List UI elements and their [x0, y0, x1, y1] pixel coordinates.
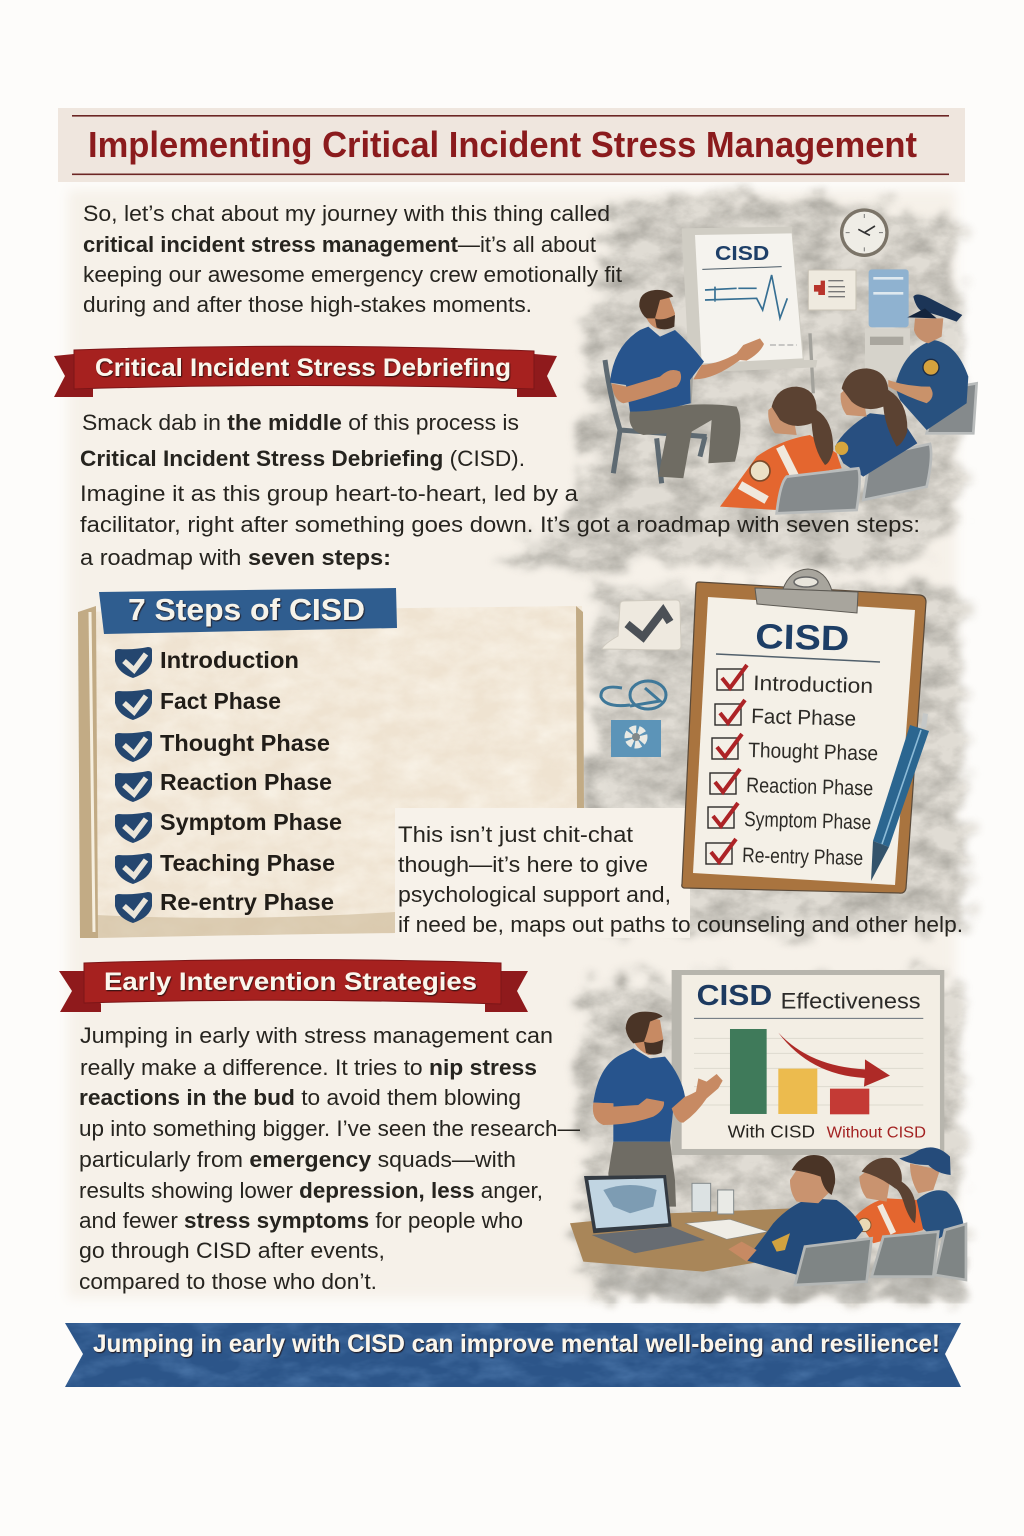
clipboard heading: CISD: [755, 617, 850, 658]
standing presenter: [593, 1012, 723, 1207]
checklist: fact phase: [715, 700, 856, 731]
heading tab: [99, 588, 397, 634]
officer with cap: [888, 295, 968, 430]
pen: [871, 713, 929, 881]
icon: blue flower tile: [611, 720, 661, 757]
support text box: if need be, maps out paths to counseling and other help.: [398, 912, 963, 937]
responder in navy: [835, 368, 917, 477]
title band: [58, 108, 965, 182]
checklist: thought phase: Thought Phase: [748, 739, 878, 765]
checklist: re-entry phase: [706, 839, 863, 870]
debriefing body text: facilitator, right after something goes down. It’s got a roadmap with seven steps:: [80, 512, 920, 537]
support text box: [395, 808, 963, 938]
clipboard checklist: [682, 569, 929, 893]
checklist: introduction: Introduction: [753, 672, 873, 698]
intro text: [83, 201, 622, 317]
step: reaction phase: [115, 769, 332, 802]
step: re-entry phase: [115, 889, 334, 923]
checklist: symptom phase: Symptom Phase: [744, 808, 871, 834]
debriefing body text: Imagine it as this group heart-to-heart, led by a: [80, 481, 579, 506]
closing banner: [65, 1323, 961, 1387]
intro text: So, let’s chat about my journey with this thing called: [83, 201, 610, 226]
early intervention body text: results showing lower depression, less anger,: [79, 1178, 543, 1203]
debriefing body text: [80, 410, 920, 570]
flipchart: [682, 227, 817, 403]
step: symptom phase: Symptom Phase: [160, 809, 342, 835]
intro text: during and after those high-stakes moments.: [83, 292, 532, 317]
checklist: reaction phase: Reaction Phase: [746, 774, 873, 800]
clipboard board: [682, 582, 926, 893]
step: teaching phase: [115, 850, 335, 884]
early intervention body text: and fewer stress symptoms for people who: [79, 1208, 523, 1233]
panel: 7 steps of CISD: [78, 588, 584, 938]
chart board: With CISD: [728, 1121, 815, 1141]
bar: green: [730, 1029, 767, 1114]
early intervention body text: Jumping in early with stress management can: [80, 1023, 553, 1048]
paper background sheet: [68, 190, 966, 1298]
early intervention body text: [79, 1023, 580, 1294]
chairs: [863, 383, 977, 500]
checklist: fact phase: Fact Phase: [751, 705, 856, 731]
step: fact phase: Fact Phase: [160, 688, 281, 714]
support text box: though—it’s here to give: [398, 852, 648, 877]
chart board: Without CISD: [827, 1124, 926, 1141]
bar: yellow: [778, 1069, 817, 1114]
step: symptom phase: [115, 809, 342, 843]
closing banner: Jumping in early with CISD can improve mental well-being and resilience!: [93, 1330, 940, 1358]
intro text: keeping our awesome emergency crew emotionally fit: [83, 262, 622, 287]
early intervention body text: compared to those who don’t.: [79, 1269, 377, 1294]
chart board: Effectiveness: [781, 988, 921, 1013]
paper sheet: [693, 597, 915, 885]
audience member: capped officer: [899, 1147, 963, 1240]
ribbon heading: early intervention strategies: Early Intervention Strategies: [104, 968, 477, 996]
debriefing body text: Smack dab in the middle of this process is: [82, 410, 519, 435]
laptop: [584, 1175, 705, 1253]
early intervention body text: particularly from emergency squads—with: [79, 1147, 516, 1172]
title: Implementing Critical Incident Stress Management: [88, 124, 917, 165]
checklist: introduction: [717, 665, 873, 698]
support text box: psychological support and,: [398, 882, 671, 907]
illustration: group debrief scene: [605, 208, 977, 513]
step: thought phase: Thought Phase: [160, 730, 330, 756]
intro text: critical incident stress management—it’s all about: [83, 232, 596, 257]
responder in orange: [720, 387, 860, 513]
icon: wall clock: [840, 208, 889, 257]
icon: blue scribble: [601, 681, 666, 709]
seated facilitator: [605, 290, 764, 483]
water glasses: [692, 1183, 734, 1214]
seated audience: [728, 1147, 966, 1285]
water cooler: [865, 269, 910, 377]
small icons column: [601, 600, 681, 757]
table: [570, 1208, 797, 1272]
audience member: seated man: [728, 1155, 863, 1277]
clip: [755, 569, 858, 613]
flipchart: CISD: [715, 242, 769, 265]
early intervention body text: go through CISD after events,: [79, 1238, 385, 1263]
checklist: reaction phase: [710, 769, 873, 800]
support text box: This isn’t just chit-chat: [398, 822, 633, 847]
audience member: woman in orange: [855, 1158, 923, 1243]
step: teaching phase: Teaching Phase: [160, 850, 335, 876]
chart board: [672, 970, 944, 1155]
illustration: effectiveness presentation: [570, 970, 966, 1285]
checklist: symptom phase: [708, 803, 871, 834]
step: introduction: Introduction: [160, 647, 299, 673]
ribbon heading: critical incident stress debriefing: Critical Incident Stress Debriefing: [95, 354, 511, 382]
debriefing body text: Critical Incident Stress Debriefing (CISD).: [80, 446, 525, 471]
ribbon heading: critical incident stress debriefing: [54, 346, 557, 397]
step: introduction: [115, 647, 299, 678]
papers on table: [685, 1219, 768, 1239]
bar: red: [830, 1089, 869, 1114]
checklist: thought phase: [712, 734, 878, 765]
early intervention body text: really make a difference. It tries to nip stress: [80, 1055, 537, 1080]
checklist: re-entry phase: Re-entry Phase: [742, 844, 863, 870]
early intervention body text: up into something bigger. I’ve seen the research—: [79, 1116, 580, 1141]
early intervention body text: reactions in the bud to avoid them blowing: [79, 1085, 521, 1110]
step: reaction phase: Reaction Phase: [160, 769, 332, 795]
step: thought phase: [115, 730, 330, 762]
step: fact phase: [115, 688, 281, 720]
chart board: CISD: [697, 980, 772, 1012]
heading tab: 7 Steps of CISD: [128, 592, 365, 627]
ribbon heading: early intervention strategies: [59, 960, 528, 1012]
icon: check speech bubble: [602, 600, 681, 650]
debriefing body text: a roadmap with seven steps:: [80, 545, 391, 570]
poster: [808, 270, 856, 310]
step: re-entry phase: Re-entry Phase: [160, 889, 334, 915]
chairs: [795, 1238, 872, 1285]
trend arrow: [778, 1033, 890, 1087]
